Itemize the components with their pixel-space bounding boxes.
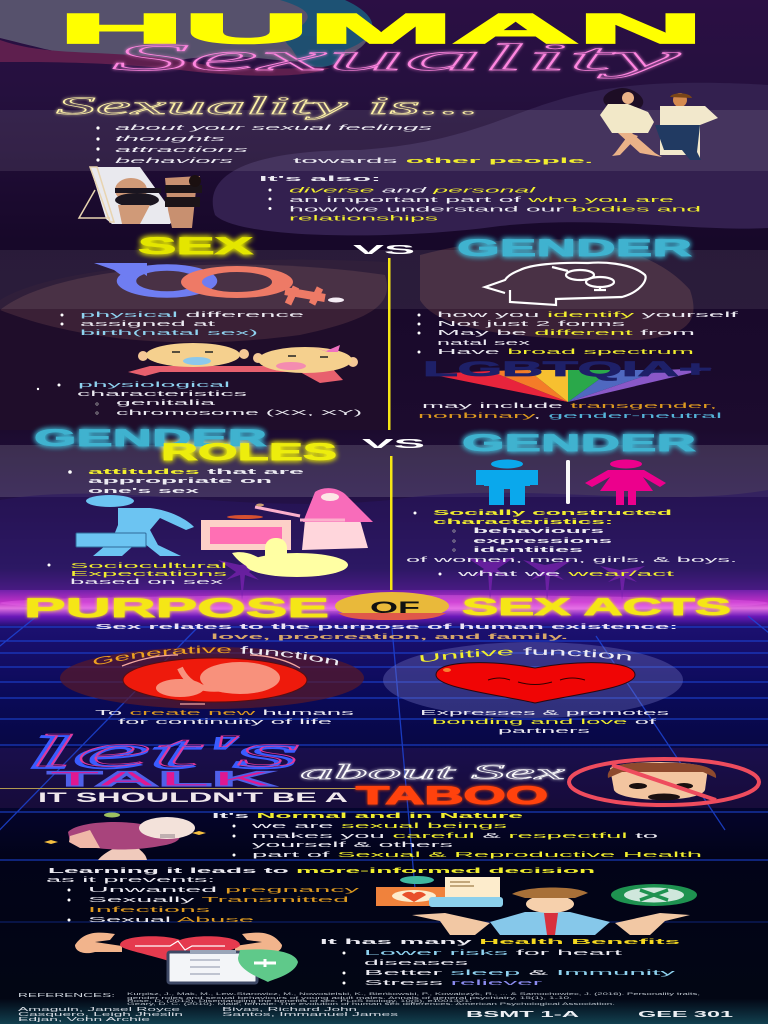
text: may include — [418, 401, 723, 420]
text block: attitudes: attitudes that are — [88, 467, 304, 476]
panel: generative function — [60, 646, 364, 726]
icon: green cross badge — [611, 884, 697, 906]
authors: Casquero, Leigh Jheslin — [18, 1012, 183, 1018]
text block: normal and in nature: makes you careful & respectful to — [252, 831, 658, 840]
text block: physiological: genitalia — [116, 398, 218, 407]
text block: gender list: Have broad spectrum — [437, 347, 694, 356]
text block: sex list: assigned at — [80, 319, 215, 328]
text block: gender list — [418, 310, 741, 356]
text: generative description: To create new humans — [95, 708, 355, 717]
references: Geary, D. C. (2010). Male, female: The evolution of human sex differences. American Psychological Association. — [127, 1002, 615, 1006]
text block: socially constructed: identities — [473, 545, 583, 554]
text block: physiological: chromosome (XX, XY) — [116, 408, 362, 417]
icon: LGBTQIA rainbow — [423, 358, 712, 402]
text: unitive description: partners — [498, 726, 591, 735]
references — [18, 992, 700, 1006]
heading: let's talk about sex — [25, 725, 567, 791]
text block: health benefits: It has many Health Benefits — [320, 937, 680, 946]
text: may include: may include transgender, — [422, 401, 717, 410]
icon: babies — [128, 343, 358, 383]
text: may include: nonbinary , gender-neutral — [418, 411, 723, 420]
icon: clipboard with shield — [168, 949, 298, 983]
title: HUMAN — [59, 5, 703, 52]
text block: normal and in nature: yourself & others — [252, 840, 454, 849]
text block: sexuality is list: attractions — [115, 145, 249, 154]
heading: GENDER ROLES — [34, 425, 337, 466]
icon: female figure — [585, 460, 666, 505]
SEX ACTS heading: SEX ACTS — [462, 594, 731, 621]
text block: it's also: an important part of who you are — [289, 195, 674, 204]
heading: GENDER second: GENDER — [462, 430, 697, 457]
heading: VS second: VS — [362, 436, 426, 451]
icon: sex symbols — [94, 263, 344, 304]
OF badge: OF — [370, 598, 420, 617]
text block: normal and in nature: part of Sexual & Reproductive Health — [252, 850, 702, 859]
text block: socially constructed: behaviours — [473, 526, 604, 535]
text: towards other people: towards other people. — [293, 156, 593, 165]
references: Kurpisz, J., Mak, M., Lew-Starowicz, M., Nowosielski, K., Bieńkowski, P., Kowalczyk, R., ... & Samochowiec, J. (2016). Personality traits, — [127, 992, 700, 996]
text block: sociocultural: Expectations — [70, 569, 228, 578]
references: Rose, D. (2012). Disentangling the benefits of sex. PLoS biology, 10(5), e1001321. — [127, 999, 472, 1003]
icon: couple — [600, 88, 718, 160]
banner: purpose of sex acts — [24, 592, 731, 623]
divider second — [390, 456, 392, 590]
text block: attitudes: appropriate on — [88, 476, 274, 485]
text block: physiological: physiological — [78, 380, 231, 389]
text block: health benefits — [320, 937, 680, 987]
text block: learning — [46, 866, 597, 924]
icon: fetus — [122, 655, 307, 704]
icon: man with briefcase — [76, 495, 194, 556]
icon: shrugging man — [412, 887, 690, 935]
text block: socially constructed — [406, 508, 737, 578]
text block: it's also: how we understand our bodies and — [289, 204, 701, 214]
arc label: generative: Generative function — [94, 646, 338, 666]
heading: GENDER: GENDER — [457, 235, 693, 262]
divider: male and female — [566, 460, 570, 504]
icon: heart — [436, 663, 635, 703]
banner: it shouldn't be a taboo — [0, 782, 548, 810]
heading: let's talk about sex: let's — [25, 727, 300, 778]
text block: gender list: Not just 2 forms — [437, 319, 626, 328]
text block: sex list: physical difference — [80, 310, 304, 319]
text: generative description — [95, 708, 355, 726]
text block: socially constructed: characteristics: — [433, 517, 613, 526]
text block: attitudes: one's sex — [88, 486, 202, 495]
icon: LGBTQIA rainbow: LGBTQIA+ — [423, 358, 712, 381]
text block: sociocultural: based on sex — [70, 577, 224, 586]
text block: gender list: natal sex — [437, 338, 531, 347]
authors: Bivas, Richard John — [222, 1007, 357, 1013]
text: purpose intro: love, procreation, and family. — [211, 632, 568, 641]
icon: pointing hand — [232, 538, 348, 577]
text block: it's also: It's also: — [259, 174, 381, 183]
heading: let's talk about sex: let's — [28, 725, 303, 776]
text block: learning: as it prevents: — [46, 875, 215, 884]
references: REFERENCES: — [18, 993, 116, 999]
icon: strong heart — [75, 933, 282, 965]
heading: Sexuality is: Sexuality is... — [56, 93, 480, 120]
text: unitive description: bonding and love of — [432, 717, 659, 726]
text: purpose intro: Sex relates to the purpose of human existence: — [95, 622, 678, 631]
text block: it's also — [259, 174, 701, 222]
authors: Santos, Immanuel James — [222, 1012, 398, 1018]
text block: learning: Unwanted pregnancy — [88, 885, 360, 894]
class label: BSMT 1-A: BSMT 1-A — [466, 1009, 579, 1019]
icon: woman cooking — [201, 488, 373, 550]
text block: sexuality is list: thoughts — [115, 134, 226, 143]
text: unitive description: Expresses & promotes — [420, 708, 670, 717]
icon: contraceptives — [376, 876, 503, 907]
subtitle: Sexuality: Sexuality — [112, 37, 681, 79]
text block: socially constructed: of women, men, girls, & boys. — [406, 555, 737, 564]
icon: head with gender symbols — [485, 263, 646, 305]
text block: sex list — [60, 310, 304, 337]
text block: learning: Learning it leads to more-informed decision — [48, 866, 597, 875]
heading: GENDER ROLES: ROLES — [161, 439, 337, 466]
text block: socially constructed: Socially constructed — [433, 508, 674, 517]
banner: purpose of sex acts: PURPOSE — [24, 593, 329, 623]
about Sex: about Sex — [300, 760, 567, 784]
text block: sociocultural — [48, 561, 228, 586]
text block: learning: Infections — [88, 905, 211, 914]
arc label: unitive: Unitive function — [420, 647, 631, 662]
authors — [18, 1007, 398, 1023]
text block: attitudes — [68, 467, 304, 495]
heading: VS: VS — [353, 242, 416, 257]
icon: no talking sign — [569, 759, 759, 805]
text block: sexuality is list: behaviors — [115, 156, 234, 165]
title — [59, 5, 703, 79]
palm trees — [218, 557, 645, 603]
text block: learning: Sexual Abuse — [88, 915, 254, 924]
text block: it's also: relationships — [289, 214, 439, 222]
text block: normal and in nature: we are sexual beings — [248, 821, 508, 830]
text: generative description: for continuity of life — [118, 717, 332, 726]
text block: socially constructed: expressions — [473, 536, 612, 545]
text block: gender list: how you identify yourself — [437, 310, 741, 319]
authors: Amaguin, Jansel Royce — [18, 1007, 180, 1013]
course label: GEE 301: GEE 301 — [638, 1009, 734, 1019]
neon grid — [0, 616, 768, 922]
divider — [388, 258, 390, 430]
text block: sociocultural: Sociocultural — [70, 561, 228, 570]
text block: normal and in nature: It's Normal and in Nature — [212, 811, 523, 820]
text block: it's also: diverse and personal — [289, 186, 536, 194]
panel: unitive function — [383, 642, 683, 735]
text block: health benefits: Better sleep & Immunity — [364, 968, 676, 977]
icon: woman with lightbulb — [44, 812, 206, 860]
text: purpose intro — [95, 622, 678, 641]
text block: learning: Sexually Transmitted — [88, 895, 349, 904]
icon: male figure — [476, 460, 538, 505]
heading: GENDER ROLES: GENDER — [34, 425, 268, 452]
authors: Edjan, Vohn Archie — [18, 1017, 150, 1023]
TALK: TALK — [48, 768, 275, 791]
icon: mirror body image — [79, 167, 202, 228]
text block: gender list: May be different from — [437, 328, 695, 337]
references: gender roles and sexual behaviours of young adult males. Annals of general psychiatry, 15(1), 1-10. — [127, 996, 572, 1000]
text block: health benefits: Lower risks for heart — [364, 948, 622, 957]
banner: it shouldn't be a taboo: IT SHOULDN'T BE A — [38, 789, 348, 805]
text block: sexuality is list: about your sexual feelings — [115, 123, 433, 132]
text block: health benefits: diseases — [364, 958, 469, 967]
TABOO: TABOO — [356, 782, 548, 810]
text: unitive description — [420, 708, 670, 735]
text block: sex list: birth(natal sex) — [80, 328, 258, 337]
text block: socially constructed: what we wear/act — [454, 569, 674, 578]
OF badge — [335, 592, 449, 620]
heading: SEX: SEX — [138, 233, 255, 260]
text block: sexuality is list — [96, 123, 433, 165]
text block: normal and in nature — [212, 811, 702, 859]
text block: health benefits: Stress reliever — [364, 978, 544, 987]
text block: physiological: characteristics — [77, 389, 248, 398]
text block: physiological — [37, 380, 362, 417]
